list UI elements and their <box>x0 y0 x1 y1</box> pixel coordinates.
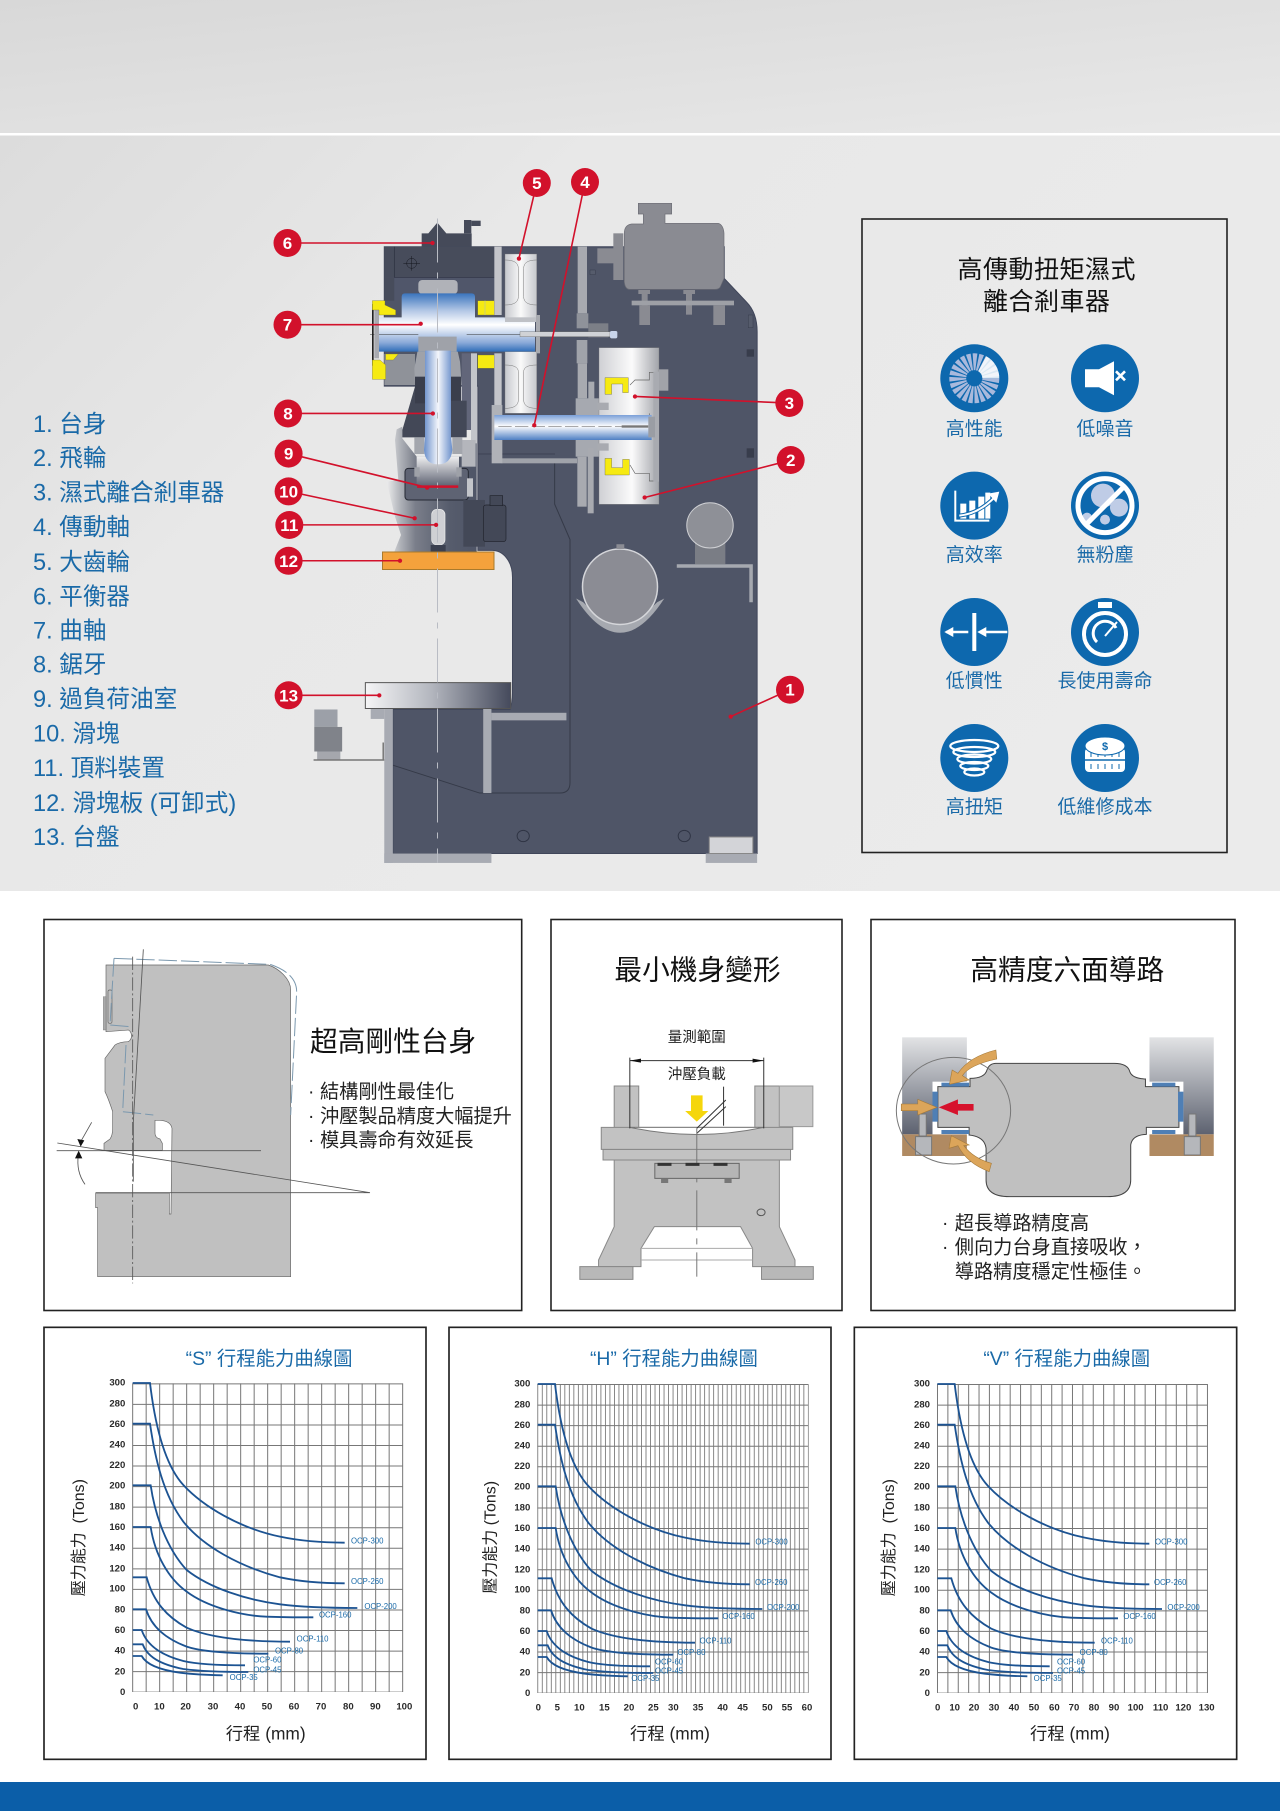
overload chamber <box>405 457 473 500</box>
icon: low maintenance cost: $ <box>1102 741 1108 753</box>
y ticks: 300 <box>914 1379 930 1390</box>
parts list: 11. 頂料裝置 <box>33 755 165 782</box>
series labels: OCP-200 <box>1167 1603 1200 1612</box>
y ticks: 160 <box>514 1523 530 1534</box>
x ticks: 110 <box>1153 1703 1168 1714</box>
x ticks: 0 <box>133 1701 138 1712</box>
machine frame body <box>384 247 757 853</box>
icon labels <box>946 418 1153 818</box>
panel: minimal frame deformation <box>551 920 842 1310</box>
y ticks: 180 <box>514 1502 530 1513</box>
grid <box>132 1383 403 1692</box>
bullet list: · <box>308 1130 314 1152</box>
parts list: 1. 台身 <box>33 411 106 438</box>
panel: H stroke chart <box>449 1327 831 1759</box>
slide and guide wall <box>387 427 477 552</box>
y ticks: 280 <box>914 1399 930 1410</box>
load label: 沖壓負載 <box>668 1066 726 1083</box>
number badges: 2 <box>786 451 795 470</box>
icon: low noise <box>1071 344 1139 412</box>
parts list: 7. 曲軸 <box>33 618 106 644</box>
drive shaft support <box>478 405 577 463</box>
number badges <box>274 168 805 709</box>
series labels: OCP-80 <box>1080 1648 1108 1657</box>
y ticks: 40 <box>919 1647 930 1658</box>
parts list: 4. 傳動軸 <box>33 514 130 541</box>
y ticks: 20 <box>919 1667 930 1678</box>
bullet list: 沖壓製品精度大幅提升 <box>320 1106 512 1128</box>
series labels: OCP-60 <box>253 1656 282 1665</box>
dimension lines <box>630 1058 764 1277</box>
ejector slot <box>431 509 446 552</box>
guide section diagram <box>896 1037 1214 1197</box>
measurement label: 量測範圍 <box>668 1028 726 1046</box>
y ticks: 300 <box>514 1379 530 1390</box>
parts list: 5. 大齒輪 <box>33 549 130 576</box>
x ticks: 50 <box>1029 1703 1039 1714</box>
bullet list: 結構剛性最佳化 <box>320 1081 454 1103</box>
series labels: OCP-60 <box>1057 1657 1086 1666</box>
force arrows <box>901 1050 997 1172</box>
y ticks: 40 <box>520 1647 530 1658</box>
grid <box>937 1384 1208 1693</box>
chart title: “H” 行程能力曲線圖 <box>590 1348 758 1370</box>
y ticks: 120 <box>514 1564 530 1575</box>
icon: high torque <box>940 724 1008 792</box>
series labels: OCP-160 <box>1123 1612 1156 1621</box>
x axis title: 行程 (mm) <box>1030 1724 1110 1744</box>
y axis title: 壓力能力 (Tons) <box>482 1481 500 1594</box>
bullet list: 側向力台身直接吸收， <box>955 1236 1147 1258</box>
parts list: 9. 過負荷油室 <box>33 686 177 713</box>
curves <box>538 1384 762 1676</box>
x ticks: 70 <box>316 1701 326 1712</box>
x ticks: 30 <box>668 1703 679 1714</box>
number badges: 10 <box>279 482 298 501</box>
slide plate <box>382 552 494 570</box>
parts list <box>33 411 236 851</box>
series labels: OCP-60 <box>655 1657 684 1666</box>
y ticks: 240 <box>914 1440 930 1451</box>
number badges: 3 <box>785 394 794 413</box>
y ticks: 20 <box>520 1667 530 1678</box>
bullet list: · <box>942 1214 948 1234</box>
x ticks: 50 <box>262 1701 272 1712</box>
machine frame and base <box>314 247 757 863</box>
left lower block <box>384 354 415 385</box>
x ticks: 35 <box>693 1703 704 1714</box>
x ticks: 40 <box>1009 1703 1019 1714</box>
x ticks: 0 <box>536 1703 541 1714</box>
balancer <box>422 220 481 247</box>
number badges: 11 <box>280 516 298 535</box>
motor drive <box>463 496 506 547</box>
series labels: OCP-300 <box>351 1536 384 1545</box>
y ticks: 80 <box>919 1605 930 1616</box>
right guide strip <box>462 353 477 467</box>
y ticks: 20 <box>115 1666 125 1677</box>
frame deflection diagram <box>57 949 370 1283</box>
series labels: OCP-80 <box>677 1648 706 1657</box>
panel heading: 高精度六面導路 <box>970 954 1164 986</box>
big gear <box>494 247 540 413</box>
series labels: OCP-160 <box>722 1612 755 1621</box>
series labels: OCP-260 <box>755 1578 788 1587</box>
top grey band <box>0 0 1280 133</box>
series labels: OCP-35 <box>631 1674 659 1683</box>
head housing <box>384 247 494 301</box>
frame internal contour <box>393 459 570 793</box>
side blocks <box>590 270 754 458</box>
y ticks: 140 <box>914 1544 930 1555</box>
curves <box>133 1383 357 1675</box>
press machine cross-section <box>287 182 791 863</box>
parts list: 12. 滑塊板 (可卸式) <box>33 790 236 817</box>
motor and clutch <box>590 203 754 504</box>
y ticks: 180 <box>109 1501 125 1512</box>
parts list: 13. 台盤 <box>33 824 120 851</box>
x axis title: 行程 (mm) <box>630 1724 710 1744</box>
connecting rod <box>424 351 452 464</box>
icon labels: 長使用壽命 <box>1057 670 1153 692</box>
bullet list: · <box>308 1082 314 1103</box>
y ticks: 60 <box>520 1626 530 1637</box>
series labels <box>631 1537 800 1683</box>
vertical shaft columns <box>576 247 608 513</box>
y ticks <box>914 1379 930 1699</box>
drive shaft <box>494 415 655 440</box>
curves <box>937 1384 1162 1676</box>
y ticks: 80 <box>115 1604 125 1615</box>
parts list: 6. 平衡器 <box>33 584 130 610</box>
control unit <box>314 709 384 760</box>
press front diagram <box>580 1058 813 1279</box>
number badges: 8 <box>283 404 293 424</box>
middle grey section <box>0 136 1280 891</box>
y ticks: 260 <box>109 1419 125 1430</box>
panel: wet clutch brake <box>862 219 1227 852</box>
y ticks: 240 <box>514 1440 530 1451</box>
x ticks: 20 <box>624 1703 634 1714</box>
x ticks <box>935 1703 1215 1714</box>
motor <box>597 203 734 325</box>
rod surrounds <box>414 337 462 385</box>
series labels: OCP-35 <box>1034 1674 1062 1683</box>
y axis title: 壓力能力 (Tons) <box>70 1479 88 1596</box>
y axis title: 壓力能力 (Tons) <box>880 1479 898 1596</box>
y ticks: 120 <box>109 1563 125 1574</box>
series labels: OCP-35 <box>230 1673 258 1682</box>
y ticks: 220 <box>914 1461 930 1472</box>
icon: low maintenance cost <box>1071 724 1139 792</box>
series labels: OCP-45 <box>655 1667 683 1676</box>
x ticks: 90 <box>370 1701 381 1712</box>
parts list: 8. 鋸牙 <box>33 652 106 678</box>
x ticks: 100 <box>1128 1703 1144 1714</box>
y ticks: 100 <box>109 1584 125 1595</box>
y ticks: 180 <box>914 1502 930 1513</box>
series labels: OCP-160 <box>319 1611 352 1620</box>
series labels: OCP-110 <box>297 1635 329 1644</box>
panel: V stroke chart <box>854 1327 1237 1759</box>
number badges: 7 <box>283 316 292 335</box>
y ticks: 60 <box>115 1625 125 1636</box>
bullet list: 模具壽命有效延長 <box>320 1130 474 1152</box>
clutch flywheel <box>597 348 668 504</box>
icon: low inertia <box>940 598 1008 666</box>
x ticks: 120 <box>1175 1703 1191 1714</box>
x ticks <box>133 1701 412 1712</box>
panel title: 高傳動扭矩濕式 <box>957 256 1136 284</box>
series labels <box>1034 1537 1200 1683</box>
series labels: OCP-45 <box>253 1665 281 1674</box>
icon: long service life <box>1071 598 1139 666</box>
series labels: OCP-45 <box>1057 1667 1085 1676</box>
center line <box>436 218 438 863</box>
x ticks: 25 <box>648 1703 659 1714</box>
oil tank <box>576 544 664 633</box>
x ticks: 90 <box>1109 1703 1119 1714</box>
y ticks: 280 <box>514 1399 530 1410</box>
series labels: OCP-200 <box>767 1603 800 1612</box>
x ticks: 30 <box>989 1703 999 1714</box>
x ticks: 55 <box>782 1703 793 1714</box>
y ticks: 260 <box>514 1420 530 1431</box>
x ticks: 50 <box>762 1703 773 1714</box>
x ticks: 80 <box>1089 1703 1099 1714</box>
y ticks: 140 <box>514 1544 530 1555</box>
bullet list <box>308 1081 512 1152</box>
chart title: “V” 行程能力曲線圖 <box>983 1348 1150 1370</box>
chart title: “S” 行程能力曲線圖 <box>186 1348 353 1370</box>
number badges: 5 <box>532 174 542 193</box>
frame lower gray parts <box>371 709 757 863</box>
icon labels: 高效率 <box>946 544 1003 566</box>
icon labels: 高扭矩 <box>946 796 1003 818</box>
parts list: 3. 濕式離合剎車器 <box>33 480 224 506</box>
yellow load arrow <box>685 1095 708 1122</box>
icon: high performance <box>940 344 1008 412</box>
head mechanism <box>370 220 617 552</box>
x axis title: 行程 (mm) <box>226 1724 306 1744</box>
panel: S stroke chart <box>44 1327 426 1759</box>
x ticks: 15 <box>599 1703 610 1714</box>
y ticks: 0 <box>120 1687 125 1698</box>
y ticks: 300 <box>109 1378 125 1389</box>
y ticks: 200 <box>109 1481 125 1492</box>
series labels: OCP-80 <box>275 1646 304 1655</box>
x ticks: 20 <box>969 1703 979 1714</box>
crosshair <box>403 256 420 271</box>
series labels <box>230 1536 397 1682</box>
leader lines <box>287 182 791 717</box>
icon labels: 低噪音 <box>1076 418 1134 440</box>
panel heading: 超高剛性台身 <box>310 1026 476 1057</box>
y ticks <box>514 1379 530 1699</box>
icon labels: 低維修成本 <box>1057 796 1153 818</box>
parts list: 10. 滑塊 <box>33 720 120 748</box>
x ticks: 100 <box>396 1701 412 1712</box>
x ticks: 5 <box>555 1703 561 1714</box>
bullet list: · <box>942 1238 948 1258</box>
panel title <box>957 256 1136 316</box>
parts list: 2. 飛輪 <box>33 445 106 472</box>
icon: high efficiency <box>940 472 1008 540</box>
y ticks: 40 <box>115 1646 125 1657</box>
number badges: 6 <box>283 234 292 253</box>
number badges: 1 <box>785 681 795 700</box>
series labels: OCP-260 <box>351 1577 384 1586</box>
number badges: 4 <box>580 173 590 192</box>
x ticks: 60 <box>1049 1703 1060 1714</box>
x ticks: 70 <box>1069 1703 1079 1714</box>
x ticks: 20 <box>180 1701 191 1712</box>
x ticks: 60 <box>802 1703 812 1714</box>
series labels: OCP-260 <box>1154 1578 1187 1587</box>
crankshaft <box>370 280 535 366</box>
x ticks: 10 <box>949 1703 960 1714</box>
icon labels: 高性能 <box>946 418 1003 440</box>
series labels: OCP-300 <box>1155 1537 1188 1546</box>
x ticks: 0 <box>935 1703 940 1714</box>
x ticks: 10 <box>574 1703 585 1714</box>
y ticks: 160 <box>914 1523 930 1534</box>
y ticks: 200 <box>514 1482 530 1493</box>
y ticks: 120 <box>914 1564 930 1575</box>
series labels: OCP-110 <box>1101 1636 1134 1645</box>
panel heading: 最小機身變形 <box>614 954 781 986</box>
y ticks: 240 <box>109 1439 125 1450</box>
y ticks: 160 <box>109 1522 125 1533</box>
icon labels: 無粉塵 <box>1076 544 1134 566</box>
x ticks: 10 <box>154 1701 165 1712</box>
number badges: 13 <box>279 686 298 705</box>
y ticks: 100 <box>914 1585 930 1596</box>
bolster plate <box>655 1163 739 1183</box>
center line and leaders <box>287 182 791 863</box>
panel: six-sided guide <box>871 920 1235 1310</box>
y ticks: 200 <box>914 1482 930 1493</box>
series labels: OCP-200 <box>364 1602 397 1611</box>
series labels: OCP-300 <box>755 1537 788 1546</box>
small pump <box>677 503 751 602</box>
y ticks: 140 <box>109 1543 125 1554</box>
red reaction arrow <box>939 1099 974 1115</box>
x ticks <box>536 1703 812 1714</box>
number badges: 9 <box>284 445 293 464</box>
y ticks: 0 <box>525 1688 530 1699</box>
leader end dots <box>377 241 733 719</box>
x ticks: 45 <box>737 1703 749 1714</box>
y ticks: 280 <box>109 1398 125 1409</box>
bullet list: 導路精度穩定性極佳。 <box>955 1261 1147 1283</box>
y ticks: 100 <box>514 1585 530 1596</box>
x ticks: 40 <box>235 1701 245 1712</box>
x ticks: 130 <box>1199 1703 1215 1714</box>
table bolster <box>365 683 511 709</box>
panel: high-rigidity frame <box>44 920 522 1310</box>
x ticks: 40 <box>717 1703 728 1714</box>
y ticks: 260 <box>914 1420 930 1431</box>
grid <box>537 1384 809 1693</box>
y ticks: 0 <box>925 1688 930 1699</box>
y ticks: 60 <box>919 1626 930 1637</box>
panel title: 離合剎車器 <box>983 288 1110 316</box>
x ticks: 60 <box>289 1701 299 1712</box>
x ticks: 80 <box>343 1701 354 1712</box>
x ticks: 30 <box>208 1701 218 1712</box>
bullet list: 超長導路精度高 <box>955 1212 1089 1234</box>
bottom blue bar <box>0 1782 1280 1811</box>
y ticks: 80 <box>520 1605 530 1616</box>
icon: no dust <box>1071 472 1139 540</box>
y ticks: 220 <box>514 1461 530 1472</box>
y ticks: 220 <box>109 1460 125 1471</box>
yellow bearings <box>372 301 494 379</box>
y ticks <box>109 1378 125 1698</box>
number badges: 12 <box>279 552 298 571</box>
thin rod <box>520 331 617 338</box>
icon labels: 低慣性 <box>946 670 1003 692</box>
bullet list <box>942 1212 1147 1283</box>
bullet list: · <box>308 1106 314 1128</box>
series labels: OCP-110 <box>700 1636 732 1645</box>
